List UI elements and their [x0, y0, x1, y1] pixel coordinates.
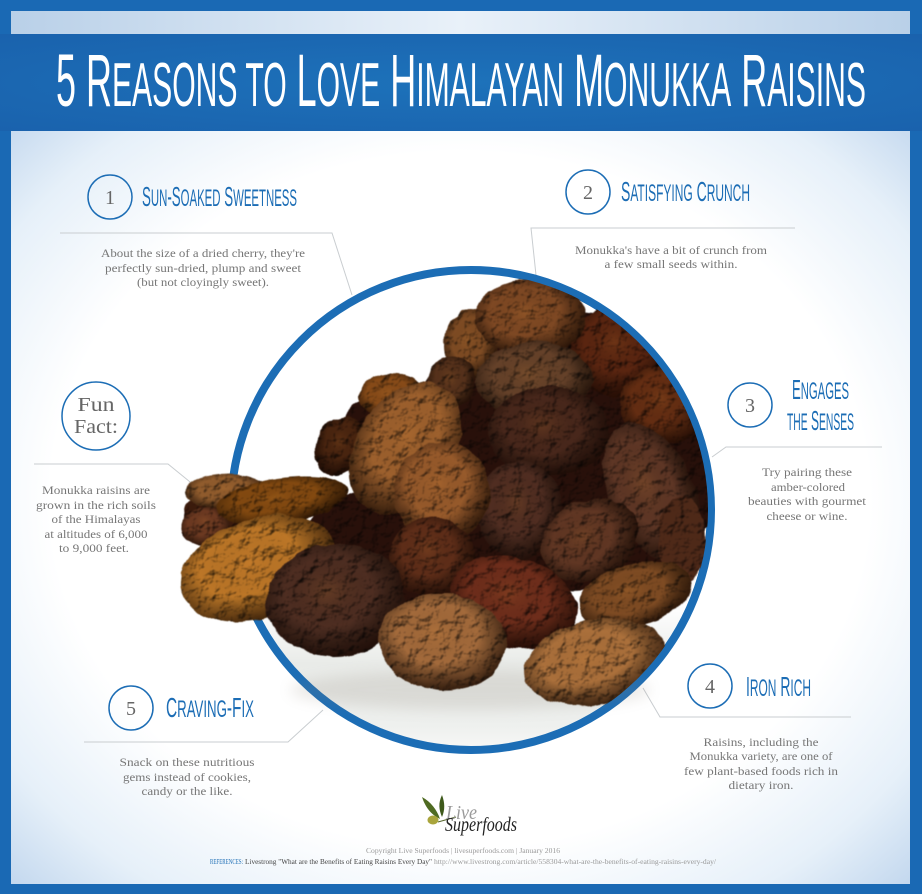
text 4: few plant-based foods rich in [684, 766, 838, 778]
text 1: About the size of a dried cherry, they're [101, 248, 305, 260]
connector lines [34, 228, 882, 742]
fun fact text: to 9,000 feet. [59, 543, 129, 555]
icon: olive branch [422, 795, 456, 824]
reason 1 [88, 175, 305, 289]
badge 5 [109, 686, 153, 730]
blue ring [231, 270, 711, 750]
top light strip [11, 11, 910, 34]
heading 3: ENGAGES [792, 374, 849, 405]
text 1: (but not cloyingly sweet). [137, 277, 269, 289]
header band [0, 34, 922, 131]
text 5 [120, 757, 255, 798]
references [210, 858, 716, 866]
circle backdrop [231, 270, 711, 750]
references: REFERENCES: [210, 858, 243, 866]
text 3: beauties with gourmet [748, 496, 867, 508]
text 4: Monukka variety, are one of [690, 751, 833, 763]
references: http://www.livestrong.com/article/558304-what-are-the-benefits-of-eating-raisins-every-day/ [434, 858, 716, 866]
text 3: amber-colored [771, 482, 845, 494]
raisin shadow [290, 670, 650, 710]
badge 3: 3 [745, 395, 755, 417]
fun fact [36, 382, 157, 555]
photo: raisins in blue ring [166, 270, 735, 750]
text 2: a few small seeds within. [604, 259, 738, 271]
reason 5 [109, 686, 255, 798]
reason 3 [728, 374, 867, 523]
references: Livestrong "What are the Benefits of Eating Raisins Every Day" [245, 858, 432, 866]
fun fact text: grown in the rich soils [36, 500, 157, 512]
badge 1: 1 [105, 187, 115, 209]
text 4: dietary iron. [728, 780, 794, 792]
text 1 [101, 248, 305, 289]
text 4 [684, 737, 838, 792]
text 5: candy or the like. [142, 786, 233, 798]
copyright: Copyright Live Superfoods | livesuperfoods.com | January 2016 [366, 847, 561, 855]
heading 4: IRON RICH [746, 671, 811, 702]
fun fact badge: Fun [78, 394, 114, 416]
text 3 [748, 467, 867, 523]
badge 1 [88, 175, 132, 219]
badge 5: 5 [126, 698, 136, 720]
fun fact badge: Fact: [74, 416, 118, 438]
logo word Live: Live [445, 802, 477, 824]
text 2 [575, 245, 767, 271]
fun fact text [36, 485, 157, 555]
fun fact text: Monukka raisins are [42, 485, 150, 497]
logo: Live Superfoods [422, 795, 517, 836]
fun fact badge [62, 382, 130, 450]
text 5: Snack on these nutritious [120, 757, 255, 769]
text 3: Try pairing these [762, 467, 852, 479]
badge 2 [566, 170, 610, 214]
heading 3: THE SENSES [787, 405, 854, 436]
text 1: perfectly sun-dried, plump and sweet [105, 263, 302, 275]
text 4: Raisins, including the [704, 737, 818, 749]
badge 4: 4 [705, 676, 715, 698]
logo word Superfoods: Superfoods [445, 814, 517, 836]
heading 1: SUN-SOAKED SWEETNESS [142, 181, 297, 212]
fun fact text: of the Himalayas [52, 514, 141, 526]
heading 5: CRAVING-FIX [166, 692, 254, 723]
text 2: Monukka's have a bit of crunch from [575, 245, 767, 257]
heading 2: SATISFYING CRUNCH [621, 176, 750, 207]
badge 2: 2 [583, 182, 593, 204]
text 5: gems instead of cookies, [123, 772, 251, 784]
badge 4 [688, 664, 732, 708]
badge 3 [728, 383, 772, 427]
heading 3 [787, 374, 854, 436]
raisin pile [166, 280, 735, 718]
reason 2 [566, 170, 767, 271]
fun fact text: at altitudes of 6,000 [44, 529, 148, 541]
reason 4 [684, 664, 838, 792]
text 3: cheese or wine. [766, 511, 848, 523]
